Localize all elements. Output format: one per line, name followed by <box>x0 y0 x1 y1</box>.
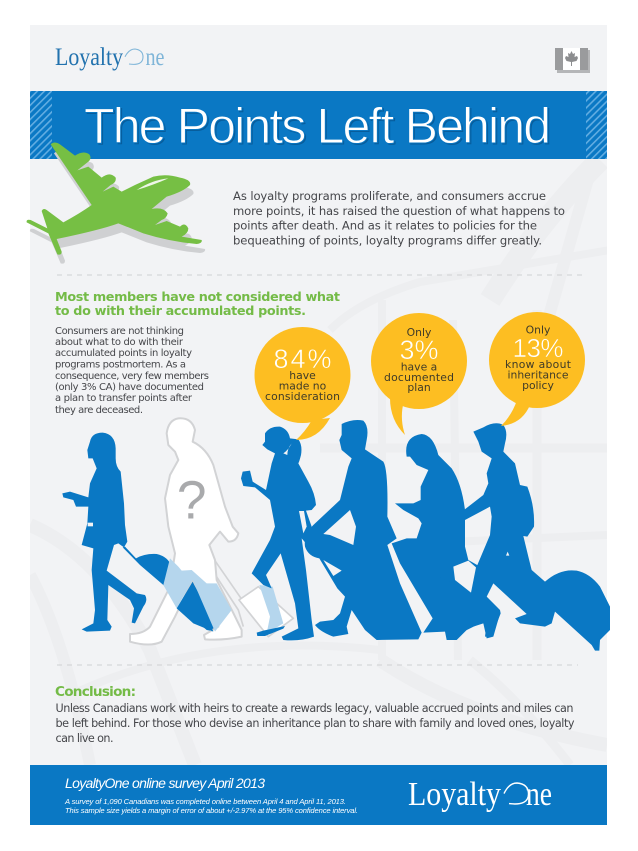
speech bubble: 3%: have a <box>401 360 437 374</box>
conclusion text: can live on. <box>56 732 114 745</box>
survey title: LoyaltyOne online survey April 2013 <box>65 775 265 791</box>
intro paragraph: more points, it has raised the question of what happens to <box>233 204 565 218</box>
icon: green airplane <box>27 142 205 264</box>
conclusion text: be left behind. For those who devise an inheritance plan to share with family and loved ones, loyalty <box>56 717 575 730</box>
speech bubble: 13%: policy <box>522 379 554 392</box>
body text: programs postmortem. As a <box>55 360 186 370</box>
intro paragraph: As loyalty programs proliferate, and consumers accrue <box>233 189 546 203</box>
survey note: A survey of 1,090 Canadians was completed online between April 4 and April 11, 2013. <box>64 797 346 806</box>
silhouette: man with bag and woman with phone <box>305 420 501 640</box>
speech bubble: 84%: 84% <box>274 344 332 374</box>
body text: consequence, very few members <box>55 371 209 382</box>
silhouette: woman with coffee <box>241 427 316 640</box>
body text: (only 3% CA) have documented <box>55 382 204 393</box>
icon: Canadian flag <box>555 48 590 73</box>
speech bubble: 13% <box>489 312 585 426</box>
speech bubble: 3%: Only <box>407 326 432 339</box>
logo: LoyaltyOne footer: Loyalty <box>408 776 501 813</box>
body text <box>55 326 209 416</box>
section heading <box>55 290 340 319</box>
intro paragraph <box>233 189 565 248</box>
section heading: to do with their accumulated points. <box>55 304 306 319</box>
logo: LoyaltyOne footer: ne <box>526 776 552 813</box>
body text: about what to do with their <box>55 337 184 348</box>
logo: LoyaltyOne header: ne <box>146 44 164 71</box>
survey note <box>64 797 358 815</box>
speech bubble: 13%: inheritance <box>508 368 569 382</box>
speech bubble: 13%: 13% <box>512 333 564 363</box>
body text: they are deceased. <box>55 405 143 416</box>
title banner: The Points Left Behind <box>84 98 551 154</box>
logo: LoyaltyOne header: Loyalty <box>55 44 123 71</box>
ghost legs over suitcase <box>163 558 232 632</box>
body text: Consumers are not thinking <box>55 326 184 337</box>
speech bubble: 3% <box>371 313 467 435</box>
speech bubble: 84% <box>254 327 350 440</box>
speech bubble: 13%: know about <box>505 358 571 371</box>
speech bubble: 3%: documented <box>384 371 454 384</box>
intro paragraph: bequeathing of points, loyalty programs differ greatly. <box>233 234 542 248</box>
body text: a plan to transfer points after <box>55 393 193 404</box>
conclusion text <box>56 702 575 745</box>
speech bubble: 13%: Only <box>526 324 551 336</box>
speech bubble: 84%: consideration <box>265 390 340 403</box>
body text: accumulated points in loyalty <box>55 348 192 359</box>
conclusion heading: Conclusion: <box>55 684 136 700</box>
silhouette: ghost traveller <box>130 418 242 644</box>
silhouette: man in cap with suitcase <box>438 423 610 651</box>
speech bubble: 84%: made no <box>279 380 327 392</box>
footer band <box>30 765 607 825</box>
question mark: ? <box>177 471 207 530</box>
section heading: Most members have not considered what <box>55 290 340 305</box>
silhouette: woman with suitcase and ghost traveller <box>62 418 293 644</box>
silhouette: woman with suitcase <box>62 433 232 632</box>
ghost suitcase <box>210 558 293 637</box>
speech bubble: 84%: have <box>289 369 316 382</box>
speech bubble: 3%: 3% <box>400 335 438 365</box>
survey note: This sample size yields a margin of error of about +/-2.97% at the 95% confidence interval. <box>65 806 358 815</box>
title banner <box>30 91 607 159</box>
title banner: The Points Left Behind <box>86 100 552 156</box>
speech bubble: 3%: plan <box>407 381 431 394</box>
conclusion text: Unless Canadians work with heirs to create a rewards legacy, valuable accrued points and miles can <box>56 702 574 715</box>
intro paragraph: points after death. And as it relates to policies for the <box>233 218 537 232</box>
rear foot seen through ghost suitcase <box>259 585 283 633</box>
